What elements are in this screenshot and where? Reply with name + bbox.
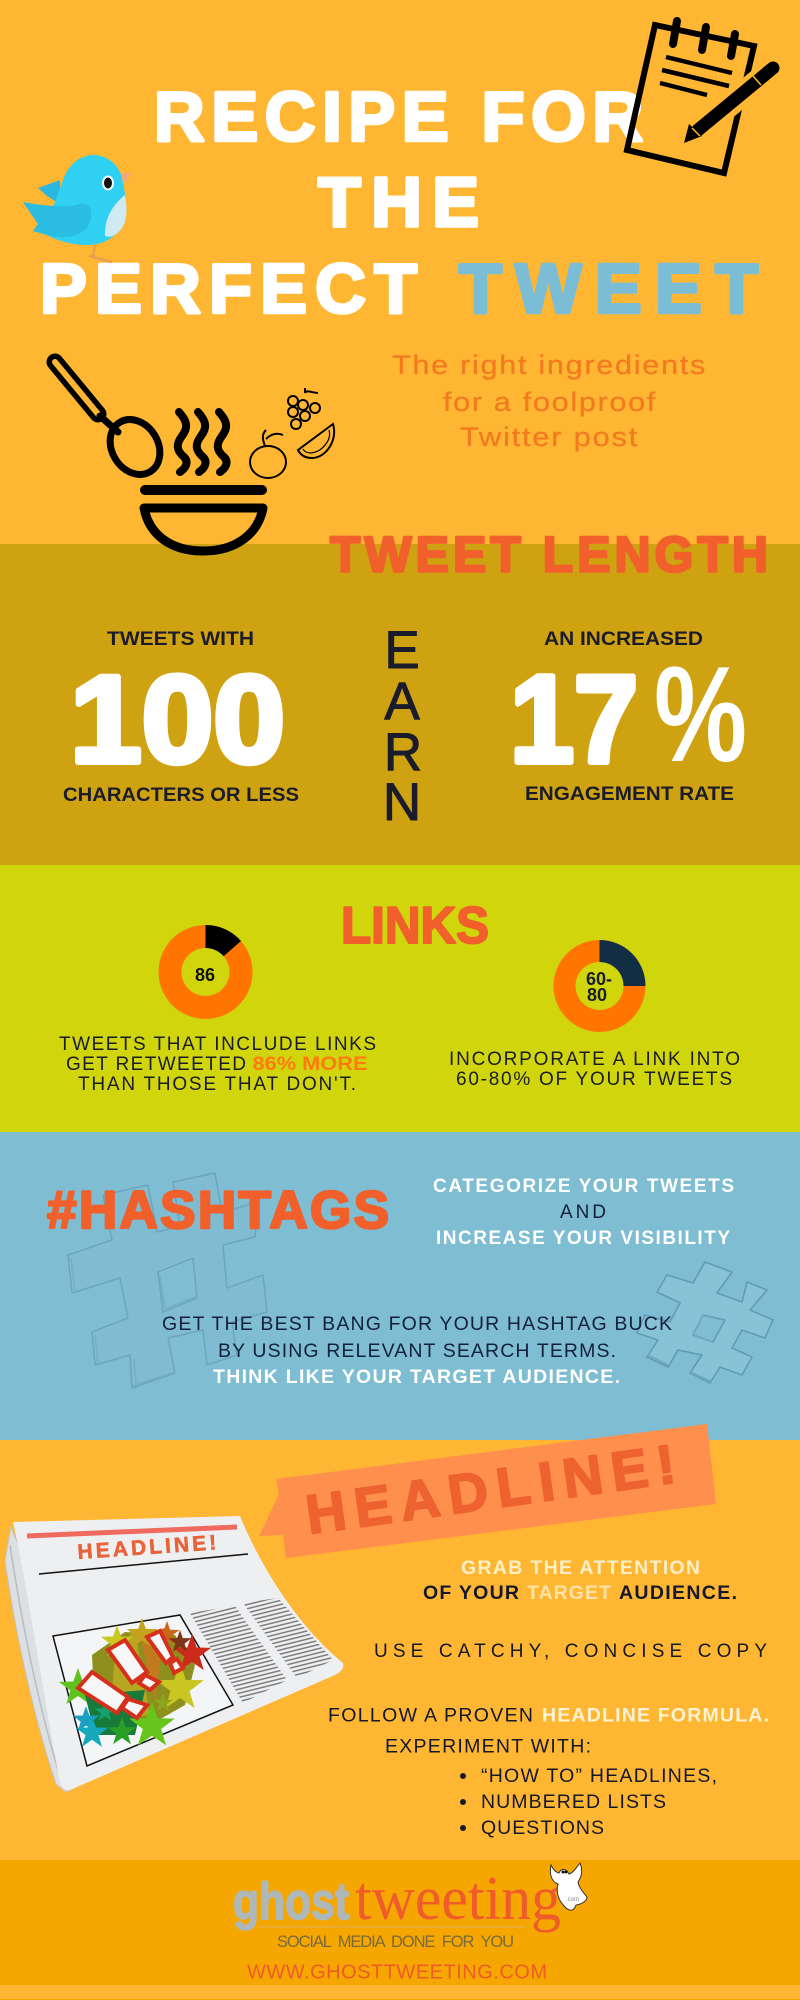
text: search terms — [162, 1313, 672, 1388]
icon: blue bird — [23, 155, 133, 262]
donut chart: 60-80: 60- — [586, 969, 612, 989]
logo: ghosttweeting: ghost — [233, 1873, 349, 1931]
heading: tweet length: TWEET LENGTH — [330, 526, 768, 582]
stat: 100 characters: TWEETS WITH — [107, 628, 254, 650]
stat: 100 characters: 100 — [70, 651, 285, 789]
icon: spoon — [55, 362, 170, 484]
stat: 17 percent: ENGAGEMENT RATE — [525, 783, 734, 805]
icon: fruit — [250, 388, 334, 478]
text: search terms: THINK LIKE YOUR TARGET AUDIENCE. — [213, 1366, 620, 1388]
tagline: SOCIAL MEDIA DONE FOR YOU — [277, 1933, 514, 1951]
heading: links: LINKS — [341, 897, 489, 955]
stat: 17 percent — [510, 628, 747, 805]
newspaper masthead — [27, 1527, 248, 1574]
donut chart: 86 — [158, 925, 252, 1019]
panel: links — [0, 865, 800, 1132]
subtitle: Twitter post — [460, 422, 639, 452]
subtitle — [392, 350, 707, 452]
text: grab attention: TARGET — [527, 1582, 611, 1604]
text: grab attention: OF YOUR — [423, 1582, 519, 1604]
stat: 17 percent: 17 — [510, 651, 638, 789]
text: grab attention — [423, 1557, 737, 1604]
icon: large faded hash — [68, 1173, 267, 1388]
list: headline types: QUESTIONS — [481, 1817, 604, 1839]
title: RECIPE FOR — [154, 78, 643, 156]
stat: 17 percent: AN INCREASED — [544, 628, 703, 650]
heading: hashtags: #HASHTAGS — [47, 1181, 389, 1240]
icon: notepad and pencil — [627, 21, 776, 173]
text: headline formula: FOLLOW A PROVEN — [328, 1704, 533, 1726]
website url: WWW.GHOSTTWEETING.COM — [247, 1962, 547, 1984]
icon: ghost — [550, 1863, 587, 1910]
panel: footer — [0, 1860, 800, 2000]
exclamation marks — [78, 1631, 183, 1718]
icon: bowl — [144, 490, 263, 551]
newspaper masthead: HEADLINE! — [77, 1531, 217, 1564]
logo: ghosttweeting: tweeting — [355, 1865, 561, 1933]
donut chart: 60-80 — [554, 940, 646, 1032]
vertical word: earn: E — [384, 621, 420, 680]
newspaper picture — [53, 1615, 233, 1766]
icon: steam — [178, 412, 227, 472]
donut chart: 60-80: 80 — [587, 985, 607, 1005]
text: link advice: 60-80% OF YOUR TWEETS — [456, 1069, 732, 1090]
donut chart: 86: 86 — [195, 965, 215, 985]
newspaper text columns — [190, 1598, 333, 1703]
text: search terms: GET THE BEST BANG FOR YOUR HASHTAG BUCK — [162, 1313, 672, 1335]
text: headline formula — [328, 1704, 769, 1758]
icon: spoon, steam, bowl and fruit — [55, 362, 334, 551]
text: catchy copy: USE CATCHY, CONCISE COPY — [374, 1641, 767, 1662]
text: categorize: INCREASE YOUR VISIBILITY — [436, 1228, 730, 1249]
list: headline types — [460, 1765, 717, 1839]
text: headline formula: HEADLINE FORMULA. — [542, 1704, 769, 1726]
text: categorize: CATEGORIZE YOUR TWEETS — [433, 1176, 734, 1197]
text: grab attention: GRAB THE ATTENTION — [461, 1557, 700, 1579]
text: link advice — [449, 1049, 740, 1090]
text: retweet stat: THAN THOSE THAT DON'T. — [78, 1074, 356, 1095]
text: categorize: AND — [560, 1202, 606, 1223]
title: TWEET — [459, 250, 758, 328]
title — [40, 78, 758, 328]
list: headline types: “HOW TO” HEADLINES, — [481, 1765, 717, 1787]
stat: 100 characters: CHARACTERS OR LESS — [63, 784, 299, 806]
text: retweet stat: GET RETWEETED — [66, 1054, 246, 1075]
text: retweet stat: 86% MORE — [252, 1054, 368, 1075]
panel: hashtags — [0, 1132, 800, 1440]
icon: ghost: .com — [566, 1897, 579, 1903]
text: retweet stat: TWEETS THAT INCLUDE LINKS — [59, 1034, 376, 1055]
panel: headline — [0, 1424, 800, 1860]
stat: 17 percent: % — [654, 638, 747, 790]
banner: headline: HEADLINE! — [302, 1433, 679, 1546]
text: link advice: INCORPORATE A LINK INTO — [449, 1049, 740, 1070]
text: grab attention: AUDIENCE. — [619, 1582, 737, 1604]
list: headline types: NUMBERED LISTS — [481, 1791, 666, 1813]
title: PERFECT — [40, 250, 417, 328]
text: categorize — [433, 1176, 734, 1249]
text: search terms: BY USING RELEVANT SEARCH TERMS. — [218, 1340, 616, 1362]
logo: ghosttweeting — [233, 1865, 561, 1933]
panel: title header — [0, 0, 800, 544]
subtitle: The right ingredients — [392, 350, 707, 380]
panel: tweet length — [0, 526, 800, 865]
stat: 100 characters — [63, 628, 299, 806]
text: headline formula: EXPERIMENT WITH: — [385, 1736, 591, 1758]
icon: small hash — [637, 1262, 773, 1383]
vertical word: earn: N — [383, 773, 421, 832]
subtitle: for a foolproof — [443, 387, 657, 417]
title: THE — [318, 163, 479, 241]
icon: newspaper — [5, 1516, 343, 1792]
vertical word: earn: A — [384, 672, 420, 731]
vertical word: earn: R — [384, 723, 422, 782]
text: retweet stat — [59, 1034, 376, 1095]
banner: headline — [259, 1424, 716, 1558]
vertical word: earn — [383, 621, 422, 832]
